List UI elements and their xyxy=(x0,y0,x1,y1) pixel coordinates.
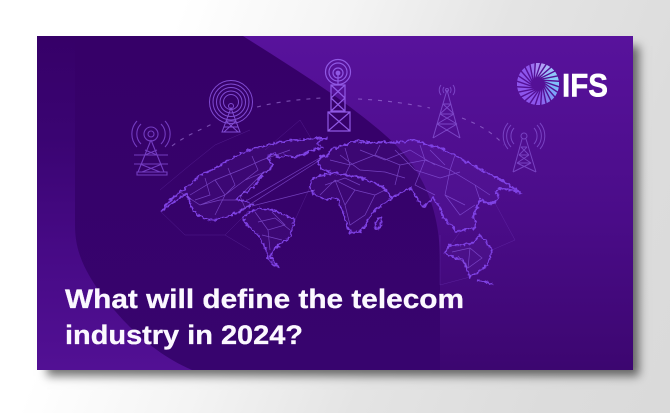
world map xyxy=(162,138,520,284)
logo: IFS swirl xyxy=(517,63,559,105)
icon: tower 2 xyxy=(210,80,252,132)
icon: tower 1 xyxy=(132,121,170,175)
faint outer mesh lines xyxy=(160,120,515,285)
title: What will define the telecom xyxy=(65,284,464,314)
map: South America xyxy=(243,208,295,267)
icon: tower 5 xyxy=(503,123,545,172)
map: Australia xyxy=(445,235,492,277)
map: Tasmania coast xyxy=(477,280,493,284)
network mesh lines xyxy=(180,145,490,268)
dashed signal arc xyxy=(172,98,504,146)
title: industry in 2024? xyxy=(65,320,303,350)
title xyxy=(65,284,464,350)
map: North America xyxy=(162,138,327,220)
icon: tower 3 xyxy=(326,60,350,131)
map: Africa xyxy=(310,173,392,233)
panel: purple card xyxy=(37,36,633,370)
icon: tower 4 xyxy=(433,85,460,138)
map: Madagascar xyxy=(375,217,382,229)
map: Eurasia xyxy=(318,140,520,232)
logo: IFS wordmark: IFS xyxy=(562,68,608,104)
card shadow panel xyxy=(37,36,633,370)
